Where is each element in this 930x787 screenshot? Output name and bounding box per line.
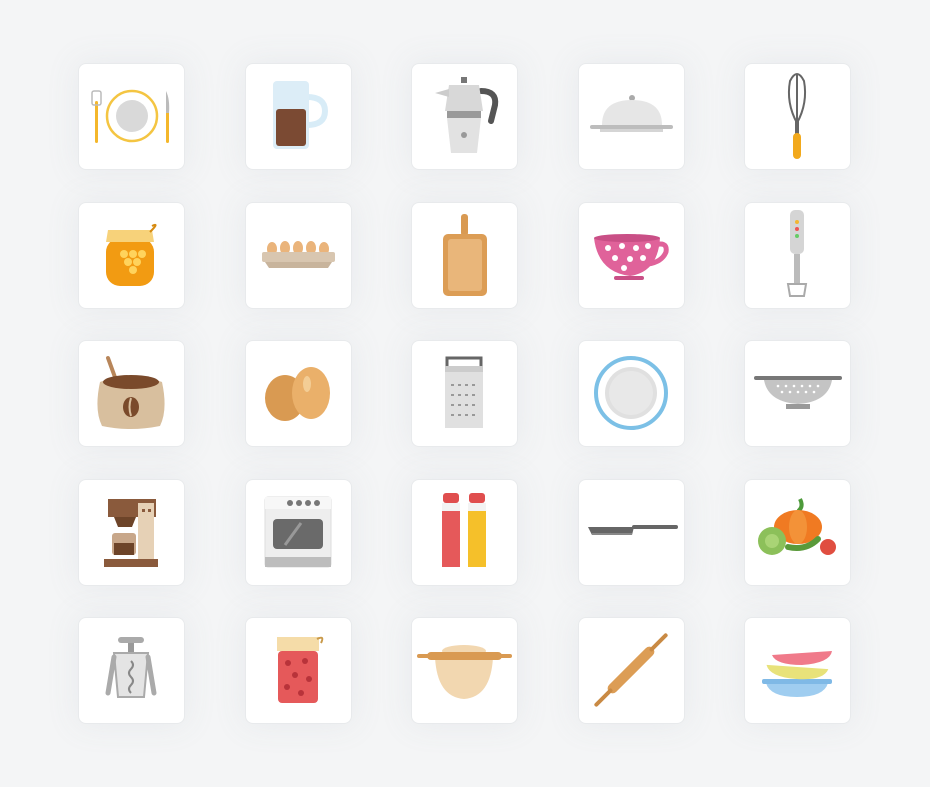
tile: stacked bowls — [744, 617, 851, 724]
tile: vegetables — [744, 479, 851, 586]
tile: cutting board — [411, 202, 518, 309]
tile: whisk — [744, 63, 851, 170]
tile: frying pan — [578, 479, 685, 586]
tile: salt and pepper shakers — [411, 479, 518, 586]
tile: corkscrew — [78, 617, 185, 724]
tile: hand blender — [744, 202, 851, 309]
tile: glass mug — [245, 63, 352, 170]
tile: eggs — [245, 340, 352, 447]
tile: jam jar — [245, 617, 352, 724]
tile: rolling pin — [578, 617, 685, 724]
tile: dough with rolling pin — [411, 617, 518, 724]
tile: honey jar — [78, 202, 185, 309]
tile: pink cup — [578, 202, 685, 309]
tile: moka pot — [411, 63, 518, 170]
tile: plate with fork and knife — [78, 63, 185, 170]
tile: cloche — [578, 63, 685, 170]
tile: grater — [411, 340, 518, 447]
tile: coffee maker — [78, 479, 185, 586]
tile: colander — [744, 340, 851, 447]
tile: blue plate — [578, 340, 685, 447]
tile: egg carton — [245, 202, 352, 309]
tile: coffee sack — [78, 340, 185, 447]
tile: oven — [245, 479, 352, 586]
